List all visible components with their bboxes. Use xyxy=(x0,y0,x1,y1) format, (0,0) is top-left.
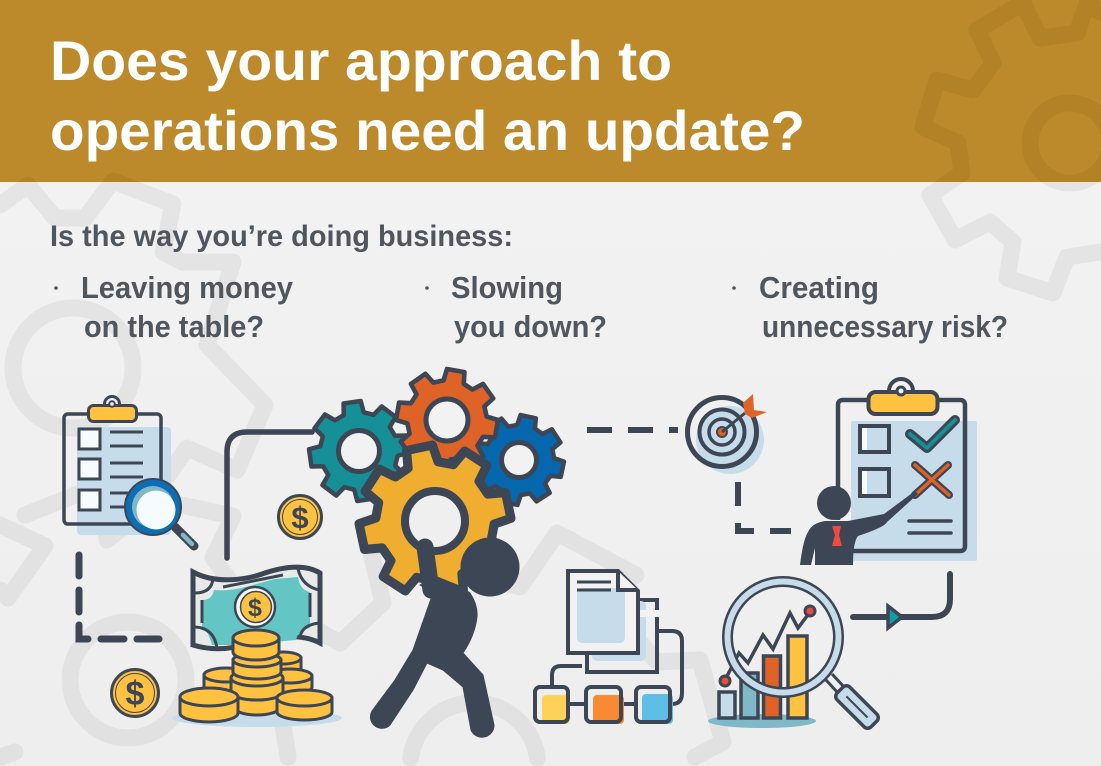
gear: orange xyxy=(389,362,505,478)
gear: blue xyxy=(466,407,572,513)
dashed connector: checklist to coin xyxy=(79,555,159,639)
title xyxy=(50,29,805,162)
icon: dollar coin xyxy=(112,670,158,716)
icon: dollar coin: $ xyxy=(126,675,145,713)
icon: banknote xyxy=(193,567,320,649)
bullet: creating unnecessary risk: Creating xyxy=(759,270,879,305)
bullet: slowing you down: you down? xyxy=(454,309,607,344)
bullet: creating unnecessary risk: unnecessary risk? xyxy=(762,309,1008,344)
dashed connector: target to presenter xyxy=(738,482,791,531)
icon: documents and workflow xyxy=(535,571,682,724)
icon: banknote: $ xyxy=(248,594,262,622)
icon: dollar coin xyxy=(278,496,322,538)
bullet: creating unnecessary risk xyxy=(732,270,1008,344)
dashed connector: gears to target xyxy=(587,427,678,433)
gear: yellow xyxy=(346,432,524,610)
gear: teal xyxy=(303,395,415,507)
icon: gears xyxy=(303,362,572,610)
icon: dollar coin: $ xyxy=(291,500,309,535)
title: operations need an update? xyxy=(50,99,805,162)
bullet: slowing you down xyxy=(425,270,607,344)
arrow: presenter to chart xyxy=(853,574,950,628)
bullet: leaving money on the table: Leaving money xyxy=(81,270,294,305)
icon: presenter at checklist board xyxy=(800,379,977,565)
header band xyxy=(0,0,1101,182)
bullet: leaving money on the table: on the table? xyxy=(84,309,264,344)
icon: target with arrow xyxy=(688,394,767,474)
icon: bar chart under magnifier xyxy=(708,582,880,730)
bullet: slowing you down: Slowing xyxy=(451,270,563,305)
icon: coin stacks xyxy=(172,630,342,727)
figure carrying gears xyxy=(370,538,520,737)
bullet: leaving money on the table xyxy=(54,270,294,344)
title: Does your approach to xyxy=(50,29,672,92)
connector: money to gears xyxy=(227,432,312,558)
subheading: Is the way you’re doing business: xyxy=(50,220,513,253)
icon: checklist with magnifier xyxy=(64,396,194,546)
